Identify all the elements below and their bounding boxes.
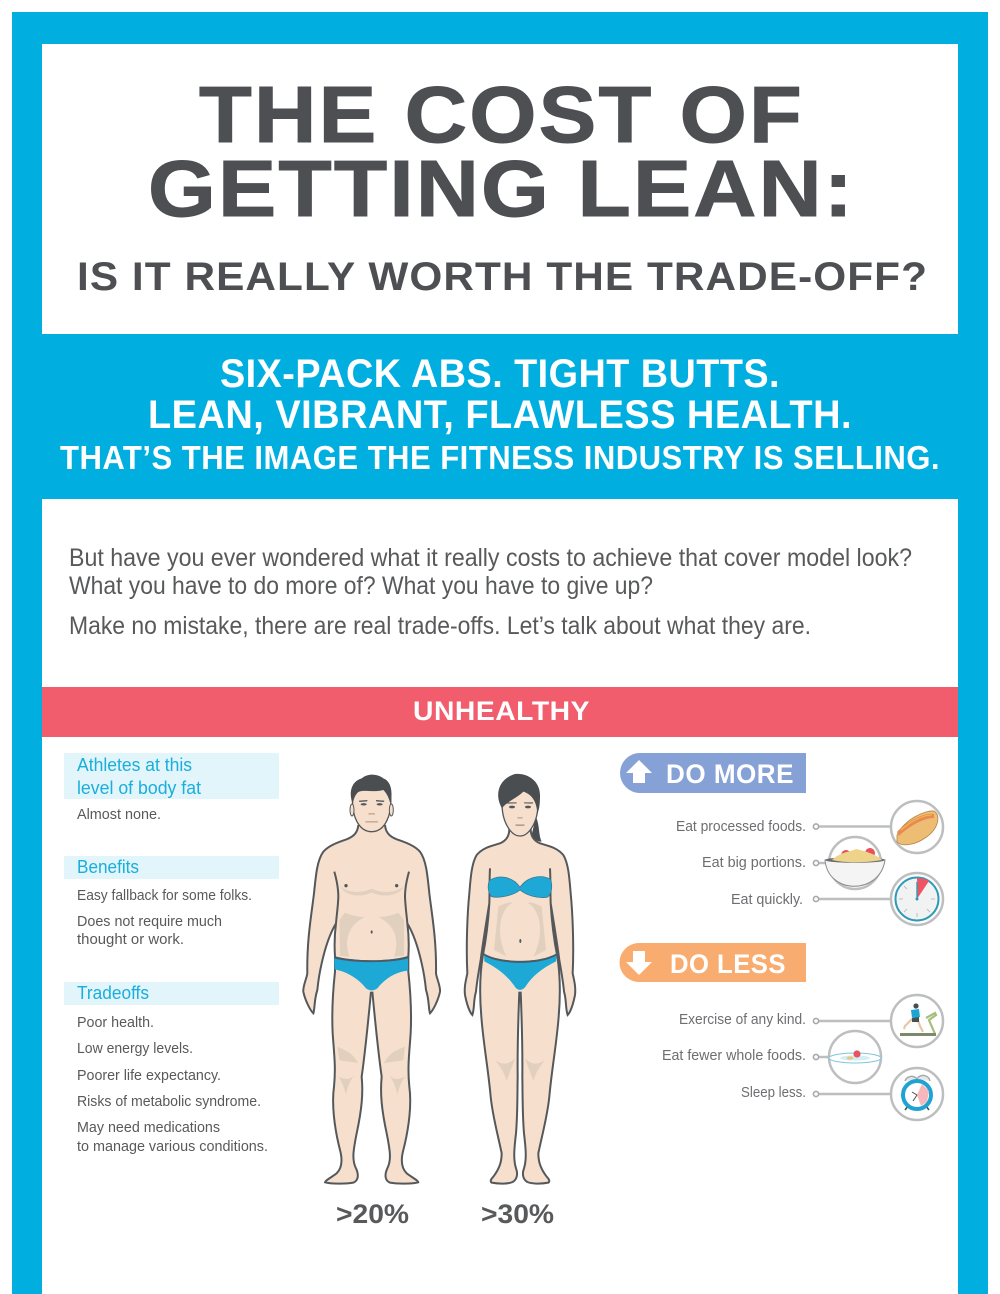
- label: >20%: >20%: [336, 1199, 409, 1229]
- intro text: Make no mistake, there are real trade-offs. Let’s talk about what they are.: [69, 612, 811, 640]
- briefs: [334, 956, 408, 990]
- icon: up arrow: [626, 760, 652, 783]
- bikini bottom: [484, 953, 557, 990]
- do more button: [620, 753, 806, 793]
- icon: clock: [896, 878, 938, 920]
- figure: man: [303, 775, 440, 1184]
- do less: exercise: Exercise of any kind.: [679, 1011, 806, 1028]
- do more button: DO MORE: [666, 759, 794, 789]
- panel: tradeoffs: to manage various conditions.: [77, 1138, 268, 1155]
- bikini top: [488, 877, 552, 898]
- do more: eat quickly: [731, 873, 943, 925]
- intro text: [69, 544, 912, 640]
- label: >30%: >30%: [481, 1199, 554, 1229]
- do less: whole foods: [662, 1031, 881, 1083]
- do less: sleep less: Sleep less.: [741, 1084, 806, 1101]
- do more: eat quickly: Eat quickly.: [731, 891, 803, 908]
- do less button: [620, 943, 806, 982]
- do more: processed foods: [676, 801, 943, 853]
- category bar: unhealthy: UNHEALTHY: [413, 696, 590, 726]
- face: [507, 802, 533, 943]
- panel: benefits: thought or work.: [77, 931, 184, 948]
- subtitle: IS IT REALLY WORTH THE TRADE-OFF?: [77, 255, 928, 299]
- intro text: But have you ever wondered what it really costs to achieve that cover model look?: [69, 544, 912, 572]
- icon: down arrow: [626, 951, 652, 975]
- panel: tradeoffs: Low energy levels.: [77, 1040, 193, 1057]
- panel: benefits: [64, 856, 279, 948]
- ponytail: [532, 817, 542, 842]
- panel: tradeoffs: May need medications: [77, 1119, 220, 1136]
- banner line 2: LEAN, VIBRANT, FLAWLESS HEALTH.: [148, 393, 852, 437]
- stomach and knee shading: [494, 902, 546, 1082]
- panel: benefits: Easy fallback for some folks.: [77, 887, 252, 904]
- icon: pasta bowl: [825, 848, 885, 886]
- panel: athletes at this level: Almost none.: [77, 806, 161, 823]
- panel: title: [42, 44, 958, 334]
- panel: athletes at this level: level of body fat: [77, 778, 201, 798]
- title line 1: THE COST OF: [199, 70, 804, 159]
- head: [353, 787, 391, 832]
- banner line 3: THAT’S THE IMAGE THE FITNESS INDUSTRY IS SELLING.: [60, 439, 940, 476]
- panel: tradeoffs: Poorer life expectancy.: [77, 1067, 221, 1084]
- do less: sleep less: [741, 1068, 943, 1120]
- panel: benefits: Benefits: [77, 857, 139, 877]
- icon: alarm clock: [903, 1075, 931, 1110]
- icon: plate: [829, 1050, 881, 1063]
- icon: hot dog: [897, 811, 938, 845]
- blue banner text: [60, 352, 940, 476]
- stomach and knee shading: [337, 886, 405, 1095]
- do more: big portions: [702, 837, 885, 889]
- hair: [498, 774, 540, 813]
- banner line 1: SIX-PACK ABS. TIGHT BUTTS.: [220, 352, 780, 396]
- do less: whole foods: Eat fewer whole foods.: [662, 1047, 806, 1064]
- do more: processed foods: Eat processed foods.: [676, 818, 806, 835]
- panel: content: [42, 499, 958, 1294]
- do less: exercise: [679, 995, 943, 1047]
- hair: [351, 775, 392, 804]
- panel: benefits: Does not require much: [77, 913, 222, 930]
- panel: tradeoffs: [64, 982, 279, 1155]
- panel: tradeoffs: Tradeoffs: [77, 983, 149, 1003]
- face: [344, 800, 398, 934]
- head: [502, 788, 538, 836]
- do less button: DO LESS: [670, 949, 786, 979]
- panel: tradeoffs: Risks of metabolic syndrome.: [77, 1093, 261, 1110]
- category bar: unhealthy: [42, 687, 958, 737]
- title line 2: GETTING LEAN:: [148, 144, 855, 233]
- intro text: What you have to do more of? What you have to give up?: [69, 572, 653, 600]
- do more: big portions: Eat big portions.: [702, 854, 806, 871]
- panel: athletes at this level: Athletes at this: [77, 755, 192, 775]
- icon: treadmill runner: [900, 1003, 936, 1036]
- panel: tradeoffs: Poor health.: [77, 1014, 154, 1031]
- panel: athletes at this level: [64, 753, 279, 823]
- figure: woman: [465, 774, 575, 1184]
